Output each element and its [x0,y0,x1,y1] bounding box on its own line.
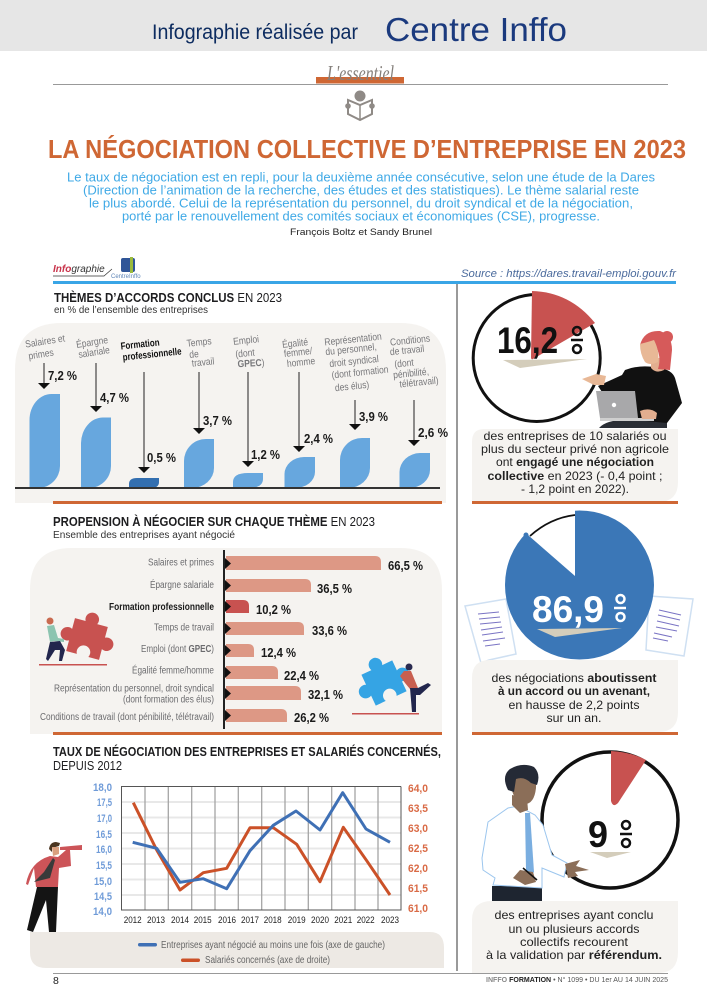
year labels: 2018 [264,915,282,926]
values: 0,5 % [147,450,176,465]
year labels: 2021 [334,915,352,926]
infographie logo: Infographie [53,264,105,275]
bar values: 10,2 % [256,602,291,617]
header band [0,0,707,51]
page number: 8 [53,975,59,987]
rotated category labels: travail [191,356,215,369]
infographie logo: CentreInffo [111,274,141,280]
shadow [503,359,587,368]
caption: un ou plusieurs accords [508,922,640,936]
trousers [492,886,542,902]
icon: reader with book [345,90,375,120]
left axis: 17,5 [97,797,112,809]
year labels: 2022 [357,915,375,926]
face [640,340,658,364]
right axis: 63,0 [408,823,428,835]
right axis: 64,0 [408,783,428,795]
heading: themes: THÈMES D’ACCORDS CONCLUS EN 2023 [54,290,282,305]
intro text: Le taux de négociation est en repli, pour la deuxième année consécutive, selon une étude de la Dares [67,170,655,184]
rotated category labels: des élus) [334,379,370,393]
year labels: 2012 [124,915,142,926]
icon: man with telescope [26,842,82,932]
rotated category labels: télétravail) [399,375,439,390]
values: 3,7 % [203,413,232,428]
left axis: 14,5 [94,891,112,903]
left axis [93,782,112,918]
rotated category labels: salariale [78,344,110,360]
percent sign [620,821,632,847]
rotated category labels: homme [286,355,316,369]
bar values: 33,6 % [312,623,347,638]
stat panel: 86,9 % [465,505,693,735]
intro text: porté par le renouvellement des comités sociaux et économiques (CSE), progresse. [122,210,600,224]
rotated category labels: droit syndical [329,353,379,369]
left axis: 14,0 [93,906,112,918]
percent sign [571,327,583,353]
bar labels: Égalité femme/homme [132,664,214,676]
heading: propension: Ensemble des entreprises ayant négocié [53,530,235,541]
rotated category labels: (dont [394,357,415,370]
rotated category labels: Formation [120,337,160,352]
laptop [596,391,638,418]
blue rule [53,281,676,284]
heading: taux de négociation: DEPUIS 2012 [53,759,122,773]
bar labels: Représentation du personnel, droit syndical [54,684,214,694]
value: 86,9 [532,589,604,630]
head [511,772,536,804]
icon: man in white shirt [482,765,589,902]
year labels: 2015 [194,915,212,926]
caption: plus du secteur privé non agricole [481,442,669,456]
caption: des entreprises ayant conclu [494,908,654,922]
neck [651,358,664,372]
rotated category labels: Représentation [324,331,382,348]
values: 2,6 % [418,425,448,440]
rotated category labels: GPEC) [237,357,265,369]
values [48,368,448,465]
bar labels: Temps de travail [154,622,214,634]
year labels: 2016 [218,915,236,926]
bar values: 22,4 % [284,668,319,683]
right axis: 61,0 [408,903,428,915]
values: 3,9 % [359,409,388,424]
year labels: 2020 [311,915,329,926]
horizontal bars [226,556,381,722]
header band: Infographie réalisée par [152,21,358,44]
tie [525,813,534,877]
section tag: l'essentiel [53,61,668,85]
hair [640,331,672,370]
year labels [124,915,399,926]
rotated category labels: pénibilité, [393,366,429,380]
stat panel: 9 % [472,751,678,974]
rotated category labels: du personnel, [325,341,377,357]
icon: woman with laptop [582,331,682,428]
panel: propension bar chart [30,548,442,735]
series: entreprises [133,793,390,889]
source: Source : https://dares.travail-emploi.gouv.fr [461,268,677,280]
value: 9 [588,814,608,855]
header band: Centre Inffo [385,11,567,48]
icon: left document [465,599,516,663]
bar labels: Emploi (dont GPEC) [141,644,214,655]
legend [30,932,444,968]
bar values: 26,2 % [294,710,329,725]
pointing hand [582,374,606,385]
shirt [482,806,567,888]
legend: Salariés concernés (axe de droite) [205,955,330,966]
caption: des entreprises de 10 salariés ou [484,429,666,443]
pointing hand [565,860,589,878]
intro text: le plus abordé. Celui de la représentation du personnel, du droit syndical et de la négociation, [89,196,633,210]
legs [599,420,667,428]
red wedge [531,291,595,359]
right axis [408,783,428,915]
year labels: 2013 [147,915,165,926]
right axis: 63,5 [408,803,428,815]
values: 1,2 % [251,447,280,462]
rotated category labels: professionnelle [122,346,182,363]
left axis: 17,0 [97,813,112,825]
right axis: 62,5 [408,843,428,855]
caption: collective en 2023 (- 0,4 point ; [488,469,662,483]
heading: propension: PROPENSION À NÉGOCIER SUR CHAQUE THÈME EN 2023 [53,514,375,529]
right axis: 61,5 [408,883,428,895]
stat panel: 16,2 % [472,291,682,504]
left axis: 18,0 [93,782,112,794]
caption [472,901,678,974]
heading: themes [54,290,282,316]
rotated category labels: Salaires et [24,333,66,350]
heading: propension [53,514,375,541]
bar labels: Formation professionnelle [109,602,214,613]
hand on laptop [640,409,657,419]
year labels: 2023 [381,915,399,926]
red wedge [611,751,646,805]
legend: Entreprises ayant négocié au moins une fois (axe de gauche) [161,940,385,951]
values: 2,4 % [304,431,333,446]
heading: taux de négociation [53,744,441,773]
percent sign: % [577,344,578,346]
caption: sur un an. [546,711,602,725]
icon: person with blue puzzle [348,647,431,714]
icon: man pushing red puzzle [39,606,120,666]
caption: à la validation par référendum. [486,948,662,962]
panel: themes bar chart [15,323,448,504]
hair [505,765,538,792]
blue pie [505,510,654,660]
bar values: 32,1 % [308,687,343,702]
bar values: 12,4 % [261,645,296,660]
left axis: 15,5 [96,860,112,872]
caption: collectifs recourent [520,935,629,949]
values: 4,7 % [100,390,129,405]
percent sign [614,595,626,621]
heading: taux de négociation: TAUX DE NÉGOCIATION DES ENTREPRISES ET SALARIÉS CONCERNÉS, [53,744,441,759]
rotated category labels: femme/ [283,345,313,359]
rotated category labels: primes [28,347,55,362]
bar labels: Conditions de travail (dont pénibilité, télétravail) [40,712,214,723]
rotated category labels: Épargne [75,334,109,350]
bar labels [40,558,214,723]
year labels: 2014 [171,915,189,926]
caption [472,429,678,504]
values: 7,2 % [48,368,77,383]
intro text [67,170,655,224]
bar labels: Salaires et primes [148,558,214,568]
rotated category labels: Emploi [233,334,259,347]
bar values: 66,5 % [388,558,423,573]
value: 16,2 [497,320,558,361]
line chart [93,782,428,926]
infographie logo [53,257,141,280]
rotated category labels: Conditions [390,333,431,348]
bar labels: Épargne salariale [150,578,214,591]
year labels: 2019 [288,915,306,926]
section tag: l'essentiel: L'essentiel [326,61,394,85]
bar values [256,558,423,725]
heading: themes: en % de l’ensemble des entreprises [54,305,208,316]
right axis: 62,0 [408,863,428,875]
rotated category labels: de [189,348,199,360]
caption: ont engagé une négociation [496,455,654,469]
hand with pen [513,870,536,885]
caption [472,660,678,735]
bars [30,394,430,488]
rotated category labels: Temps [186,336,212,349]
arrows [44,363,414,469]
rotated category labels [24,331,439,393]
intro text: (Direction de l’animation de la recherche, des études et des statistiques). Le thème salarial reste [83,184,639,198]
left axis: 16,0 [96,844,112,856]
bar labels: (dont formation des élus) [123,694,214,706]
caption: des négociations aboutissent [492,671,657,685]
left axis: 15,0 [94,876,112,888]
series: salariés concernés [133,803,390,895]
bar values: 36,5 % [317,581,352,596]
torso [598,366,682,423]
caption: à un accord ou un avenant, [498,684,650,698]
footer: INFFO FORMATION • N° 1099 • DU 1er AU 14 JUIN 2025 [486,975,668,984]
rotated category labels: (dont [235,347,256,360]
left axis: 16,5 [96,829,112,841]
rotated category labels: de travail [389,343,425,357]
caption: - 1,2 point en 2022). [521,482,629,496]
neck [512,795,528,813]
rotated category labels: Égalité [282,337,309,350]
authors: François Boltz et Sandy Brunel [290,227,432,238]
shadow [537,628,622,637]
caption: en hausse de 2,2 points [508,698,640,712]
shadow [590,852,631,858]
year labels: 2017 [241,915,259,926]
icon: right document [646,596,693,656]
rotated category labels: (dont formation [331,364,389,381]
